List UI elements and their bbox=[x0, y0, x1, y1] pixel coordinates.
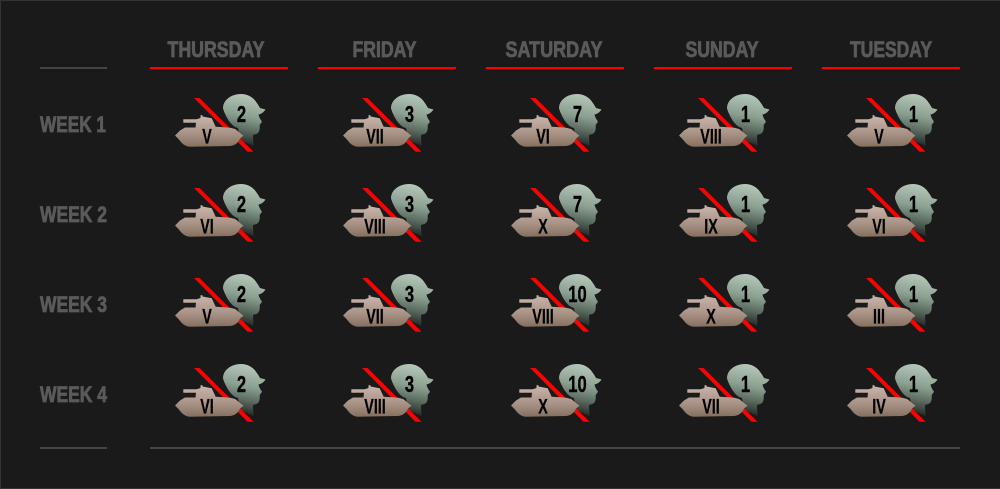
icon: week 4 tuesday: IV bbox=[872, 395, 886, 418]
icon: week 1 thursday: V bbox=[202, 125, 212, 148]
icon: week 1 tuesday bbox=[847, 94, 938, 152]
icon: week 4 sunday: 1 bbox=[741, 372, 750, 398]
icon: week 2 tuesday bbox=[847, 184, 938, 242]
icon: week 4 friday: VIII bbox=[364, 395, 386, 418]
icon: week 4 friday bbox=[343, 364, 434, 422]
bottom rule bbox=[150, 447, 960, 449]
icon: week 2 saturday: 7 bbox=[573, 192, 582, 218]
icon: week 4 saturday: X bbox=[538, 395, 548, 418]
column header: Sunday bbox=[654, 37, 792, 69]
icon: week 3 thursday: V bbox=[202, 305, 212, 328]
icon: week 4 thursday bbox=[175, 364, 266, 422]
icon: week 1 friday: 3 bbox=[405, 102, 414, 128]
row label: week 2: WEEK 2 bbox=[40, 202, 107, 227]
icon: week 2 friday bbox=[343, 184, 434, 242]
icon: week 4 saturday bbox=[511, 364, 602, 422]
icon: week 3 friday: 3 bbox=[405, 282, 414, 308]
icon: week 3 tuesday: 1 bbox=[909, 282, 918, 308]
icon: week 1 friday bbox=[343, 94, 434, 152]
icon: week 4 sunday: VII bbox=[702, 395, 720, 418]
icon: week 3 sunday bbox=[679, 274, 770, 332]
icon: week 4 friday: 3 bbox=[405, 372, 414, 398]
icon: week 4 thursday: 2 bbox=[237, 372, 246, 398]
row label: week 4: WEEK 4 bbox=[40, 382, 108, 407]
icon: week 2 friday: 3 bbox=[405, 192, 414, 218]
icon: week 3 saturday: VIII bbox=[532, 305, 554, 328]
icon: week 3 friday bbox=[343, 274, 434, 332]
icon: week 2 thursday: VI bbox=[200, 215, 214, 238]
icon: week 3 thursday: 2 bbox=[237, 282, 246, 308]
icon: week 2 sunday bbox=[679, 184, 770, 242]
column header: Friday: FRIDAY bbox=[352, 37, 417, 62]
row label: week 1: WEEK 1 bbox=[40, 112, 106, 137]
icon: week 3 tuesday: III bbox=[873, 305, 885, 328]
icon: week 1 saturday bbox=[511, 94, 602, 152]
bottom left rule bbox=[40, 447, 107, 449]
icon: week 2 saturday: X bbox=[538, 215, 548, 238]
icon: week 2 tuesday: VI bbox=[872, 215, 886, 238]
row label: week 3: WEEK 3 bbox=[40, 292, 107, 317]
icon: week 1 tuesday: 1 bbox=[909, 102, 918, 128]
icon: week 2 saturday bbox=[511, 184, 602, 242]
icon: week 4 tuesday bbox=[847, 364, 938, 422]
column header: Thursday: THURSDAY bbox=[168, 37, 265, 62]
icon: week 2 friday: VIII bbox=[364, 215, 386, 238]
icon: week 1 saturday: 7 bbox=[573, 102, 582, 128]
icon: week 1 sunday: 1 bbox=[741, 102, 750, 128]
icon: week 3 sunday: X bbox=[706, 305, 716, 328]
top left rule bbox=[40, 67, 107, 69]
icon: week 2 tuesday: 1 bbox=[909, 192, 918, 218]
icon: week 3 tuesday bbox=[847, 274, 938, 332]
column header: Thursday bbox=[150, 37, 288, 69]
icon: week 1 sunday: VIII bbox=[700, 125, 722, 148]
icon: week 4 sunday bbox=[679, 364, 770, 422]
icon: week 3 friday: VII bbox=[366, 305, 384, 328]
icon: week 1 thursday bbox=[175, 94, 266, 152]
icon: week 1 saturday: VI bbox=[536, 125, 550, 148]
icon: week 4 saturday: 10 bbox=[568, 372, 587, 398]
icon: week 2 sunday: IX bbox=[704, 215, 718, 238]
column header: Friday bbox=[318, 37, 456, 69]
icon: week 2 thursday: 2 bbox=[237, 192, 246, 218]
icon: week 1 tuesday: V bbox=[874, 125, 884, 148]
icon: week 1 thursday: 2 bbox=[237, 102, 246, 128]
icon: week 2 sunday: 1 bbox=[741, 192, 750, 218]
icon: week 4 thursday: VI bbox=[200, 395, 214, 418]
icon: week 4 tuesday: 1 bbox=[909, 372, 918, 398]
icon: week 3 thursday bbox=[175, 274, 266, 332]
column header: Sunday: SUNDAY bbox=[686, 37, 759, 62]
column header: Saturday: SATURDAY bbox=[506, 37, 603, 62]
icon: week 3 sunday: 1 bbox=[741, 282, 750, 308]
column header: Saturday bbox=[486, 37, 624, 69]
icon: week 2 thursday bbox=[175, 184, 266, 242]
icon: week 3 saturday bbox=[511, 274, 602, 332]
icon: week 1 friday: VII bbox=[366, 125, 384, 148]
column header: Tuesday: TUESDAY bbox=[850, 37, 932, 62]
icon: week 1 sunday bbox=[679, 94, 770, 152]
icon: week 3 saturday: 10 bbox=[568, 282, 587, 308]
column header: Tuesday bbox=[822, 37, 960, 69]
